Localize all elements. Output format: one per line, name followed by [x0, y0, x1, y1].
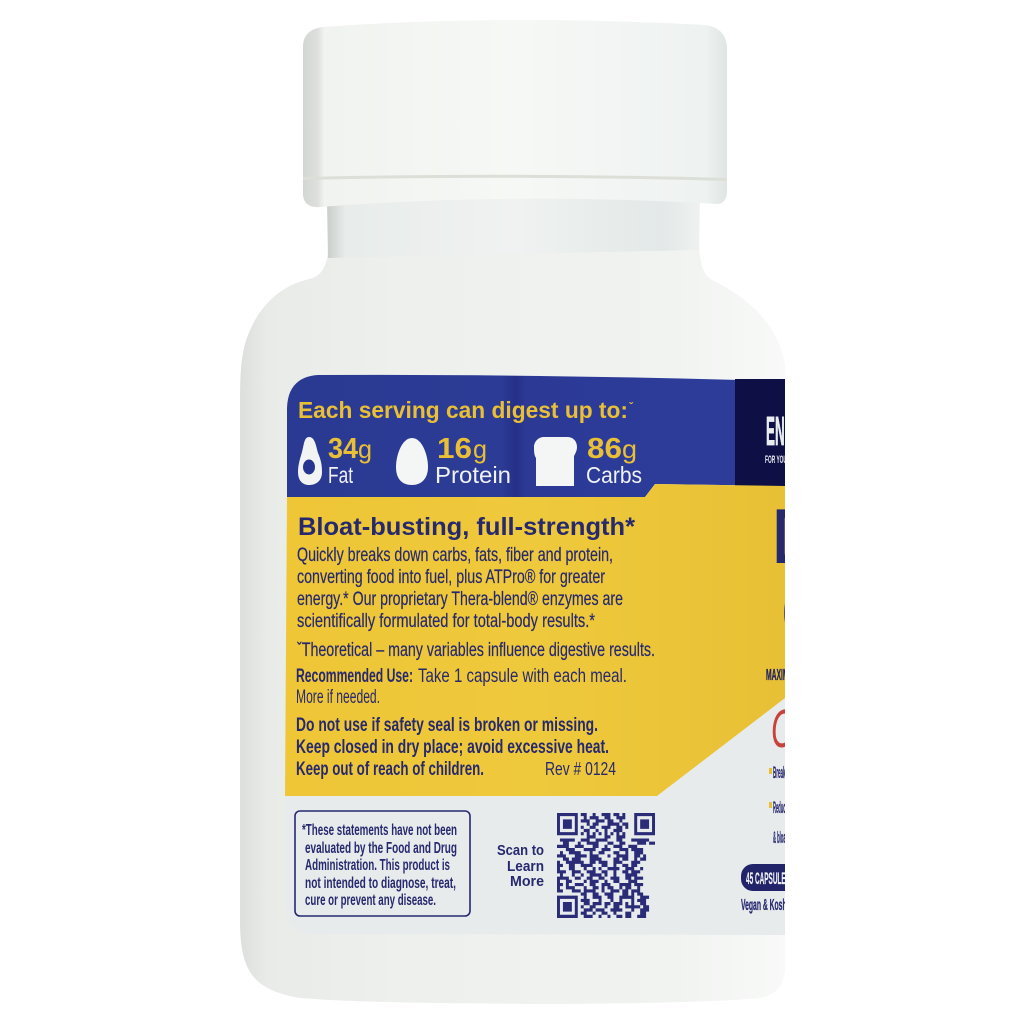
- stat: fat: g: [358, 434, 372, 464]
- text block: recommended use: [296, 668, 626, 703]
- stat: fat: 34: [328, 433, 358, 465]
- front panel clipped text: ENZ: [766, 408, 793, 454]
- heading: each serving: Each serving can digest up to:: [298, 397, 628, 423]
- panel: yellow info section: [285, 484, 785, 796]
- stat: carbs: Carbs: [586, 462, 642, 488]
- text block: warnings: Do not use if safety seal is broken or missing.: [296, 715, 598, 736]
- front panel clipped text: Reduces: [773, 798, 790, 817]
- stat: fat: Fat: [328, 462, 353, 488]
- front panel clipped text: Vegan & Kosher: [741, 897, 793, 914]
- scan to learn more: Scan to: [497, 842, 544, 859]
- stat: fat: [328, 438, 370, 483]
- stat: carbs: g: [622, 434, 637, 464]
- cap: [303, 20, 727, 207]
- text block: theoretical note: ˇTheoretical – many variables influence digestive results.: [297, 640, 655, 661]
- panel: FDA disclaimer box: cure or prevent any disease.: [305, 892, 436, 909]
- text block: recommended use: More if needed.: [296, 687, 380, 708]
- front panel clipped text: & bloat: [773, 828, 787, 847]
- text block: warnings: Keep out of reach of children.: [296, 759, 484, 780]
- bottle body: [240, 245, 785, 1004]
- scan to learn more: More: [510, 873, 544, 890]
- panel: FDA disclaimer box: *These statements have not been: [302, 822, 457, 839]
- front panel clipped text: FOR YOUR HEALTH: [765, 454, 811, 466]
- capsule count pill: 45 CAPSULES: [746, 869, 790, 888]
- text block: description: scientifically formulated for total-body results.*: [297, 611, 595, 632]
- stat: protein: Protein: [435, 462, 511, 488]
- caret mark: ˇ: [629, 400, 634, 414]
- red script: Ca: [771, 699, 811, 759]
- scan to learn more: [497, 845, 544, 886]
- text block: description: [297, 545, 623, 632]
- revision number: Rev # 0124: [545, 759, 616, 779]
- text block: description: converting food into fuel, plus ATPro® for greater: [297, 567, 605, 588]
- icon: egg: [396, 438, 428, 485]
- text block: warnings: Keep closed in dry place; avoid excessive heat.: [296, 737, 609, 758]
- icon: bread: [534, 437, 577, 486]
- stat: carbs: [587, 438, 642, 483]
- bullet 2: [769, 800, 785, 844]
- bottle neck with shrink wrap: [327, 198, 700, 258]
- stat: protein: g: [473, 434, 487, 464]
- heading: bloat-busting: Bloat-busting, full-strength*: [298, 513, 635, 541]
- bullet 1: [769, 766, 785, 778]
- panel: FDA disclaimer box: Administration. This product is: [305, 857, 450, 874]
- text block: recommended use: Recommended Use:: [296, 666, 413, 687]
- front panel clipped text: Breaks: [773, 763, 788, 782]
- text block: recommended use: Take 1 capsule with each meal.: [418, 666, 627, 687]
- product label: [285, 375, 822, 935]
- product name letter 2: C: [782, 569, 822, 657]
- panel: FDA disclaimer box: [295, 811, 470, 916]
- stat: protein: [436, 438, 510, 483]
- text block: description: energy.* Our proprietary Thera-blend® enzymes are: [297, 589, 623, 610]
- text block: description: Quickly breaks down carbs, fats, fiber and protein,: [297, 545, 613, 566]
- QR code: [557, 813, 655, 918]
- stat: protein: 16: [437, 433, 472, 465]
- icon: avocado: [298, 437, 322, 485]
- dark front band: [735, 379, 785, 486]
- front panel clipped text: MAXIMUM: [766, 667, 799, 684]
- text block: warnings: [296, 715, 609, 780]
- bottle: [240, 20, 785, 1004]
- scan to learn more: Learn: [507, 858, 544, 875]
- panel: blue digest header: [287, 375, 785, 497]
- label white lower section: [496, 698, 785, 935]
- panel: FDA disclaimer box: not intended to diagnose, treat,: [305, 875, 456, 892]
- stat: carbs: 86: [587, 433, 622, 465]
- panel: FDA disclaimer box: evaluated by the Food and Drug: [305, 840, 457, 857]
- capsule count pill: [741, 864, 785, 891]
- front panel clipped text: [741, 416, 785, 914]
- product name letter: D: [773, 492, 813, 580]
